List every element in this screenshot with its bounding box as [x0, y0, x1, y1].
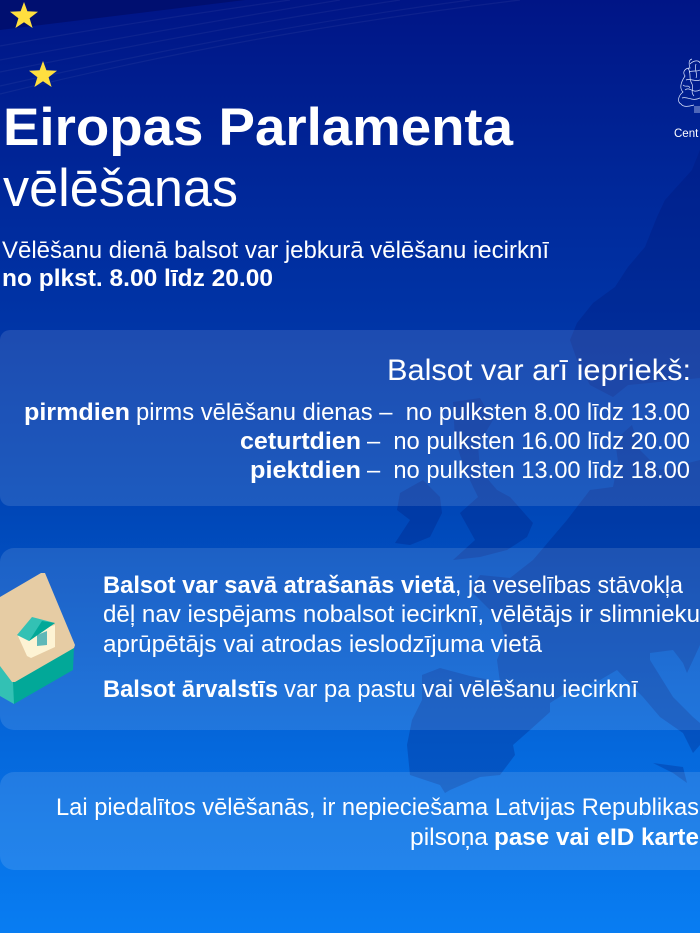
star: second [29, 61, 57, 87]
panel: early voting [0, 330, 700, 506]
text: voting at location: Balsot var savā atrašanās vietā [103, 572, 455, 599]
text: voting abroad: Balsot ārvalstīs [103, 676, 278, 703]
early voting: Thursday: – no pulksten 16.00 līdz 20.00 [367, 428, 690, 455]
text: voting abroad: var pa pastu vai vēlēšanu iecirknī [284, 676, 638, 703]
title: vēlēšanas [3, 159, 238, 218]
logo: Central Election Commission emblem: Cent [674, 128, 699, 140]
logo: Central Election Commission emblem [674, 59, 700, 140]
text: voting at location [103, 572, 700, 658]
map of Europe [395, 150, 700, 793]
star: top [10, 2, 38, 28]
text: voting at location: aprūpētājs vai atrodas ieslodzījuma vietā [103, 631, 542, 658]
early voting: Friday: piektdien [250, 457, 361, 484]
panel: voting at location or abroad [0, 548, 700, 730]
text: required documents: pase vai eID karte [494, 824, 699, 851]
text: voting abroad [103, 676, 638, 703]
text: voting at location: dēļ nav iespējams nobalsot iecirknī, vēlētājs ir slimnieku [103, 601, 700, 628]
text block: election day hours: no plkst. 8.00 līdz 20.00 [2, 265, 273, 292]
panel: required documents [0, 772, 700, 870]
title: Eiropas Parlamenta [3, 98, 514, 157]
early voting: Monday: pirms vēlēšanu dienas – no pulksten 8.00 līdz 13.00 [136, 399, 690, 426]
text block: election day hours [2, 237, 549, 292]
early voting: Monday: pirmdien [24, 399, 130, 426]
heading: early voting: Balsot var arī iepriekš: [387, 354, 691, 387]
early voting: Thursday: ceturtdien [240, 428, 361, 455]
text block: election day hours: Vēlēšanu dienā balsot var jebkurā vēlēšanu iecirknī [2, 237, 549, 264]
text: required documents: pilsoņa [410, 824, 488, 851]
icon: house [0, 573, 75, 704]
early voting: Friday: – no pulksten 13.00 līdz 18.00 [367, 457, 690, 484]
text: voting at location: , ja veselības stāvokļa [455, 572, 683, 599]
title [3, 98, 514, 218]
text: required documents [56, 794, 699, 851]
